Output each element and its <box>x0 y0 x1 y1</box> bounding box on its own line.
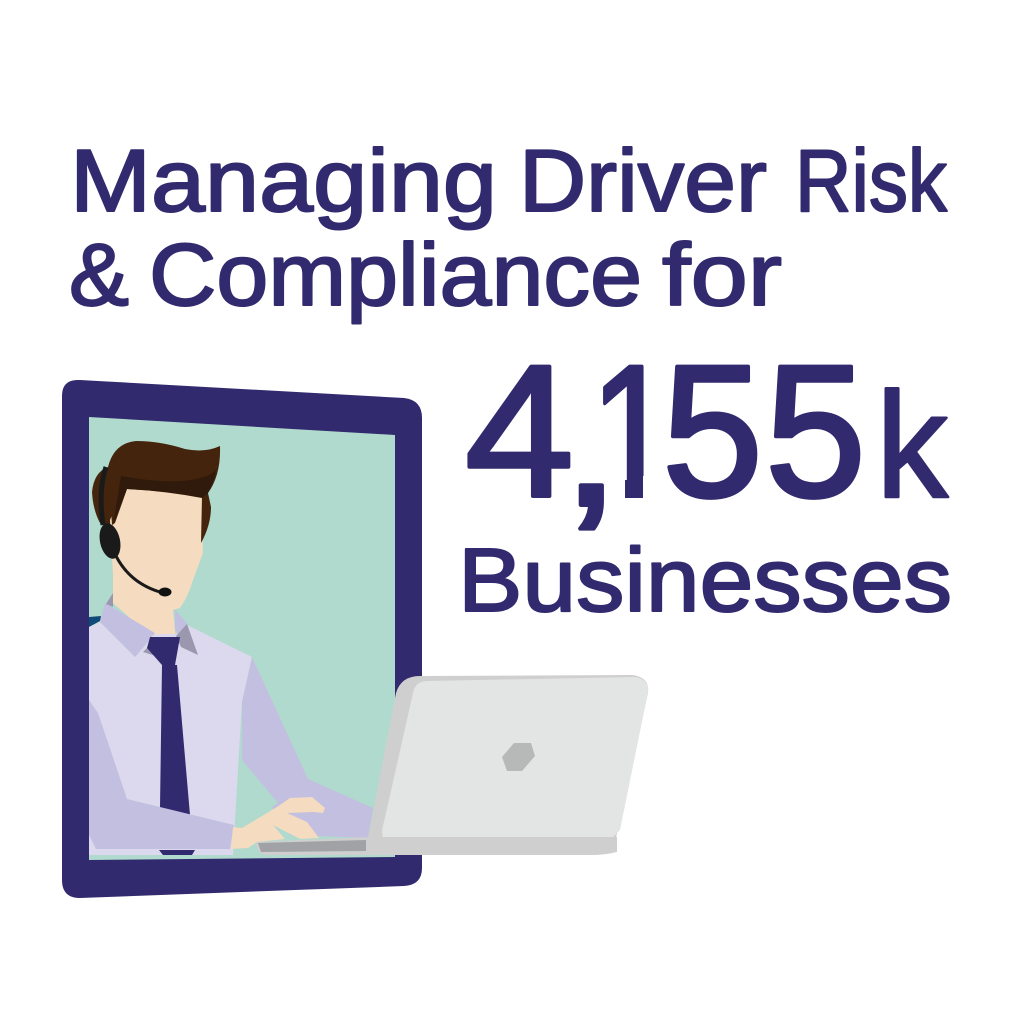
headset mic <box>116 556 160 592</box>
title: Managing <box>70 131 497 230</box>
hair back <box>92 467 120 530</box>
big number: 4 <box>465 326 574 536</box>
title: Compliance <box>149 225 642 324</box>
collar <box>100 593 198 657</box>
left sleeve <box>89 700 234 849</box>
laptop lid front <box>382 677 648 838</box>
title: for <box>662 225 782 324</box>
hair top <box>108 441 220 543</box>
laptop keyboard <box>258 840 366 852</box>
big number: 1 <box>590 326 675 536</box>
title: & <box>69 225 129 324</box>
title: Driver <box>519 131 767 230</box>
laptop logo <box>502 743 535 771</box>
big number: k <box>876 361 949 529</box>
neck and face <box>110 484 205 640</box>
big number: 5 <box>662 326 763 536</box>
headset ear piece <box>96 521 124 561</box>
laptop <box>256 675 648 855</box>
shirt body <box>89 622 252 855</box>
headset band <box>101 467 106 525</box>
title: Risk <box>795 131 948 230</box>
title <box>69 131 948 324</box>
tablet screen <box>89 417 395 860</box>
hand <box>231 797 325 849</box>
mint gap under arm <box>235 760 278 838</box>
laptop base <box>256 837 617 855</box>
right sleeve <box>242 657 373 838</box>
subheading: Businesses <box>458 531 952 631</box>
dark blue chair <box>89 616 101 627</box>
illustration: tablet with support agent <box>62 380 648 898</box>
tablet frame <box>62 380 422 898</box>
big number <box>467 364 950 531</box>
laptop lid back <box>368 675 648 838</box>
big number: , <box>561 339 621 545</box>
big number: 5 <box>765 326 866 536</box>
tie <box>147 637 190 815</box>
hair shadow <box>113 470 216 525</box>
agent <box>89 441 373 855</box>
